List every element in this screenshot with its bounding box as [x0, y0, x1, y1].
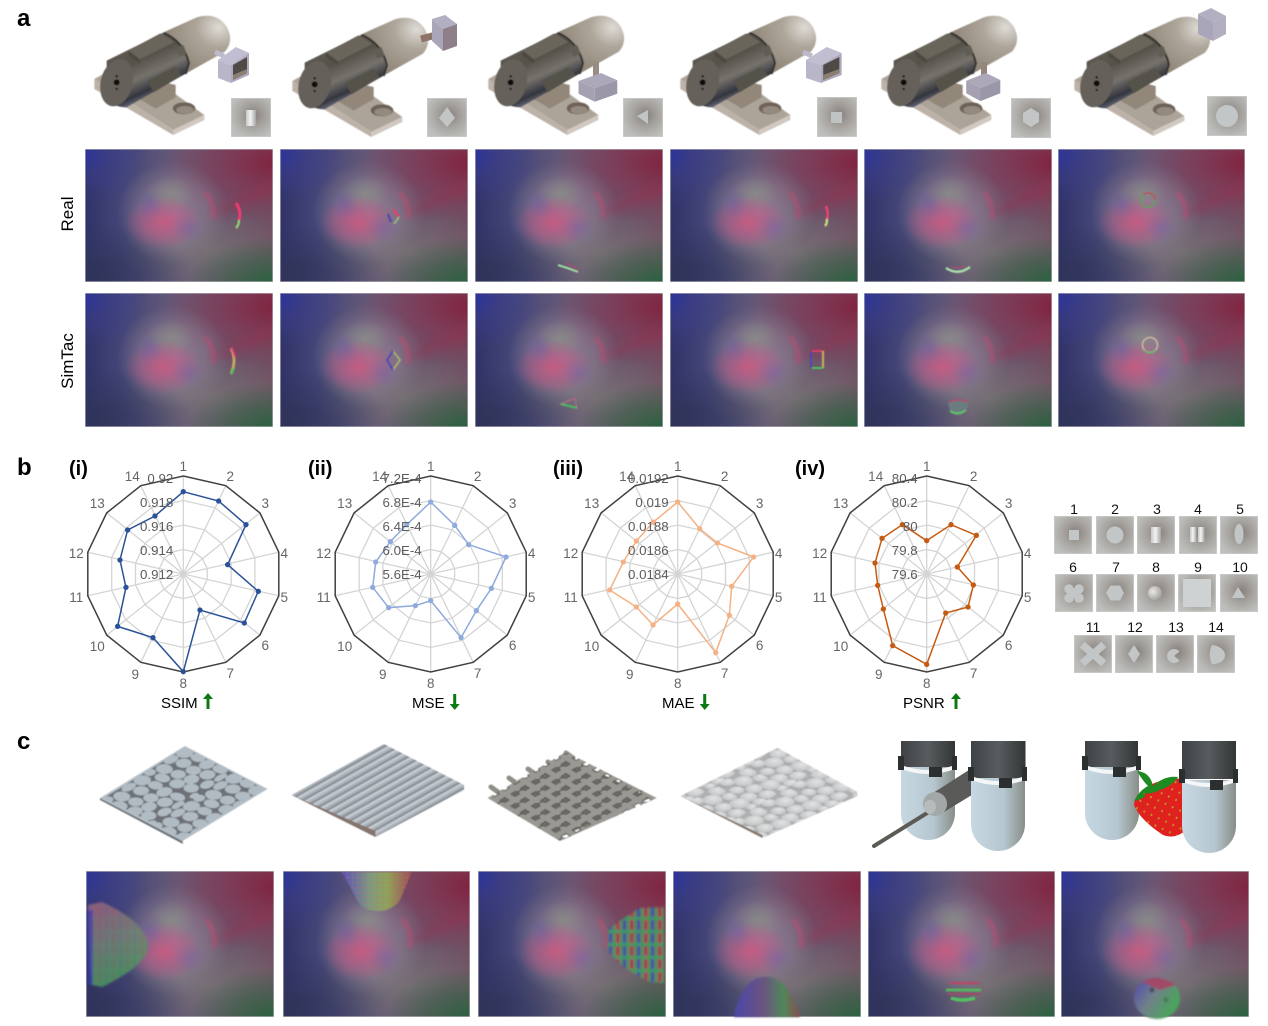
shape 12 diamond: 12: [1127, 619, 1143, 635]
axis labels: 4: [528, 546, 536, 561]
shape 3 cylinder: 3: [1153, 501, 1161, 517]
shape 10 triangle: 10: [1232, 559, 1248, 575]
radial tick labels: 80.2: [892, 495, 918, 510]
axis labels: 5: [281, 590, 288, 605]
axis labels: 14: [372, 469, 388, 484]
radial tick labels: 0.0192: [628, 471, 669, 486]
axis labels: 3: [509, 496, 516, 511]
shape 5 ellipse: [1220, 501, 1258, 554]
axis labels: 10: [90, 639, 105, 654]
metric label PSNR: PSNR: [903, 695, 945, 712]
shape 9 large square: [1178, 559, 1216, 612]
radar chart iii MAE: [563, 459, 783, 691]
shape 11 cross: 11: [1086, 619, 1100, 635]
axis labels: 7: [227, 666, 234, 681]
axis labels: 11: [564, 590, 578, 605]
axis labels: 3: [1005, 496, 1012, 511]
subpanel label i: (i): [69, 458, 88, 480]
axis labels: 3: [262, 496, 269, 511]
axis labels: 11: [317, 590, 331, 605]
real image 6: [966, 103, 1268, 336]
axis labels: 6: [262, 638, 269, 653]
radial tick labels: 6.0E-4: [383, 543, 422, 558]
metric label MAE: MAE: [662, 695, 695, 712]
axis labels: 1: [923, 459, 930, 474]
radial tick labels: 80: [903, 519, 918, 534]
shape 4 double cylinder: [1179, 501, 1217, 554]
shape 2 circle: 2: [1111, 501, 1119, 517]
shape 8 sphere: [1137, 559, 1175, 612]
shape 7 hexagon: 7: [1112, 559, 1120, 575]
radial tick labels: 0.0186: [628, 543, 669, 558]
radial tick labels: 0.914: [140, 543, 173, 558]
axis labels: 9: [626, 667, 633, 682]
metric label MSE: [412, 694, 460, 712]
axis labels: 7: [970, 666, 977, 681]
axis labels: 12: [563, 546, 578, 561]
metric label MAE: [662, 694, 710, 712]
shape 1 square: [1054, 501, 1092, 554]
SimTac tactile images row: [0, 247, 1268, 481]
PSNR data line: [875, 525, 976, 664]
shape 7 hexagon: [1096, 559, 1134, 612]
axis labels: 12: [812, 546, 827, 561]
SSIM data line: [118, 492, 258, 672]
radar chart ii MSE: [316, 459, 536, 691]
real image 4: [578, 103, 977, 336]
subpanel label ii: (ii): [308, 458, 332, 480]
radial tick labels: 0.019: [635, 495, 669, 510]
axis labels: 14: [868, 469, 884, 484]
axis labels: 5: [1024, 590, 1031, 605]
axis labels: 4: [1024, 546, 1032, 561]
axis labels: 14: [125, 469, 140, 484]
radial tick labels: 0.912: [140, 567, 173, 582]
axis labels: 1: [674, 459, 681, 474]
axis labels: 2: [721, 469, 728, 484]
axis labels: 1: [427, 459, 434, 474]
axis labels: 2: [227, 469, 234, 484]
texture: bubble plate: [680, 748, 858, 838]
shape 2 circle: [1096, 501, 1134, 554]
shape 6 clover: 6: [1069, 559, 1077, 575]
simulated image 1: [0, 247, 392, 481]
radial tick labels: 0.916: [140, 519, 173, 534]
radial tick labels: [628, 471, 669, 582]
axis labels: 12: [316, 546, 331, 561]
tactile image: weave: [386, 821, 785, 1026]
axis labels: 7: [474, 666, 481, 681]
radial tick labels: 5.6E-4: [383, 567, 422, 582]
real image 1: [0, 103, 392, 336]
tactile image: pebbles: [0, 821, 393, 1026]
radial tick labels: 7.2E-4: [383, 471, 422, 486]
MAE data line: [610, 502, 754, 653]
subpanel label iii: (iii): [553, 458, 583, 480]
tactile image: strawberry: [969, 821, 1268, 1026]
axis labels: 3: [756, 496, 763, 511]
radar chart i SSIM: [69, 459, 289, 691]
radial tick labels: 79.6: [892, 567, 918, 582]
axis labels: 7: [721, 666, 728, 681]
row label Real: Real: [58, 197, 77, 231]
shape 4 double cylinder: 4: [1194, 501, 1202, 517]
radial tick labels: [140, 471, 173, 582]
subpanel label iv: (iv): [795, 458, 825, 480]
radial tick labels: 80.4: [892, 471, 918, 486]
axis labels: 13: [584, 496, 599, 511]
sensor 2 with diamond indenter: [292, 15, 467, 137]
axis labels: 4: [775, 546, 783, 561]
texture: pebble plate: [100, 746, 268, 844]
shape 10 triangle: [1220, 559, 1258, 612]
shape 11 cross: [1074, 619, 1112, 673]
shape 14 half ellipse: 14: [1208, 619, 1224, 635]
radial tick labels: [892, 471, 918, 582]
axis labels: 12: [69, 546, 84, 561]
metric label SSIM: SSIM: [161, 695, 198, 712]
axis labels: 9: [875, 667, 882, 682]
simulated image 4: [578, 247, 977, 481]
axis labels: 8: [923, 676, 930, 691]
axis labels: [69, 459, 289, 691]
panel label a: a: [17, 5, 31, 32]
radial tick labels: 6.4E-4: [383, 519, 422, 534]
indenter shape legend: [1054, 501, 1258, 673]
sensor 1 with cylinder indenter: [94, 16, 271, 137]
metric label SSIM: [161, 693, 213, 712]
tactile image: bubbles: [581, 821, 980, 1026]
metric label MSE: MSE: [412, 695, 445, 712]
axis labels: 4: [281, 546, 289, 561]
axis labels: 1: [180, 459, 187, 474]
panel label c: c: [17, 728, 30, 755]
axis labels: [563, 459, 783, 691]
texture: woven fabric: [488, 752, 657, 841]
radial tick labels: 6.8E-4: [383, 495, 422, 510]
shape 12 diamond: [1115, 619, 1153, 673]
shape 14 half ellipse: [1197, 619, 1235, 673]
simulated image 3: [383, 247, 782, 481]
axis labels: 6: [1005, 638, 1012, 653]
tactile image: screwdriver: [776, 821, 1173, 1026]
panel c: textures and objects: [100, 741, 1238, 853]
real image 5: [772, 103, 1171, 336]
axis labels: 10: [584, 639, 599, 654]
simulated image 2: [188, 247, 587, 481]
sensor 5 with hexagon indenter: [881, 16, 1051, 138]
axis labels: 13: [337, 496, 352, 511]
axis labels: 5: [528, 590, 535, 605]
axis labels: 5: [775, 590, 782, 605]
gripper with strawberry: [1082, 741, 1238, 853]
axis labels: 2: [474, 469, 481, 484]
radial tick labels: 0.92: [147, 471, 173, 486]
gripper with screwdriver: [874, 741, 1027, 851]
axis labels: 8: [674, 676, 681, 691]
panel b: radar charts: [69, 458, 1032, 712]
radial tick labels: 0.0188: [628, 519, 669, 534]
real image 2: [188, 103, 587, 336]
texture: ribbed curved plate: [292, 744, 464, 837]
axis labels: 13: [90, 496, 105, 511]
row label SimTac: SimTac: [58, 333, 77, 389]
axis labels: 14: [619, 469, 635, 484]
simulated image 5: [772, 247, 1171, 481]
bottom tactile images row: [0, 821, 1268, 1026]
metric label PSNR: [903, 693, 961, 712]
radial tick labels: 0.918: [140, 495, 173, 510]
axis labels: 10: [337, 639, 352, 654]
axis labels: 9: [132, 667, 139, 682]
MSE data line: [373, 502, 506, 638]
radial tick labels: [383, 471, 422, 582]
shape 13 pac-man: [1156, 619, 1194, 673]
radial tick labels: 79.8: [892, 543, 918, 558]
axis labels: 9: [379, 667, 386, 682]
sensor 3 with triangle indenter: [488, 16, 663, 137]
shape 13 pac-man: 13: [1168, 619, 1184, 635]
shape 3 cylinder: [1137, 501, 1175, 554]
sensor 4 with square indenter: [680, 16, 857, 137]
radial tick labels: 0.0184: [628, 567, 669, 582]
radar chart iv PSNR: [812, 459, 1032, 691]
shape 1 square: 1: [1070, 501, 1078, 517]
axis labels: 8: [427, 676, 434, 691]
axis labels: 11: [69, 590, 83, 605]
panel label b: b: [17, 454, 32, 481]
axis labels: [316, 459, 536, 691]
shape 8 sphere: 8: [1152, 559, 1160, 575]
axis labels: 6: [509, 638, 516, 653]
shape 5 ellipse: 5: [1236, 501, 1244, 517]
simulated image 6: [966, 247, 1268, 481]
axis labels: 8: [180, 676, 187, 691]
real image 3: [383, 103, 782, 336]
axis labels: 11: [813, 590, 827, 605]
axis labels: 13: [833, 496, 848, 511]
axis labels: [812, 459, 1032, 691]
tactile image: ribs: [191, 821, 588, 1026]
axis labels: 2: [970, 469, 977, 484]
axis labels: 10: [833, 639, 848, 654]
real tactile images row: [0, 103, 1268, 336]
panel a: sensor renders with indenters: [94, 8, 1247, 138]
shape 6 clover: [1055, 559, 1093, 612]
sensor 6 with circle indenter: [1074, 8, 1247, 136]
shape 9 large square: 9: [1194, 559, 1202, 575]
axis labels: 6: [756, 638, 763, 653]
